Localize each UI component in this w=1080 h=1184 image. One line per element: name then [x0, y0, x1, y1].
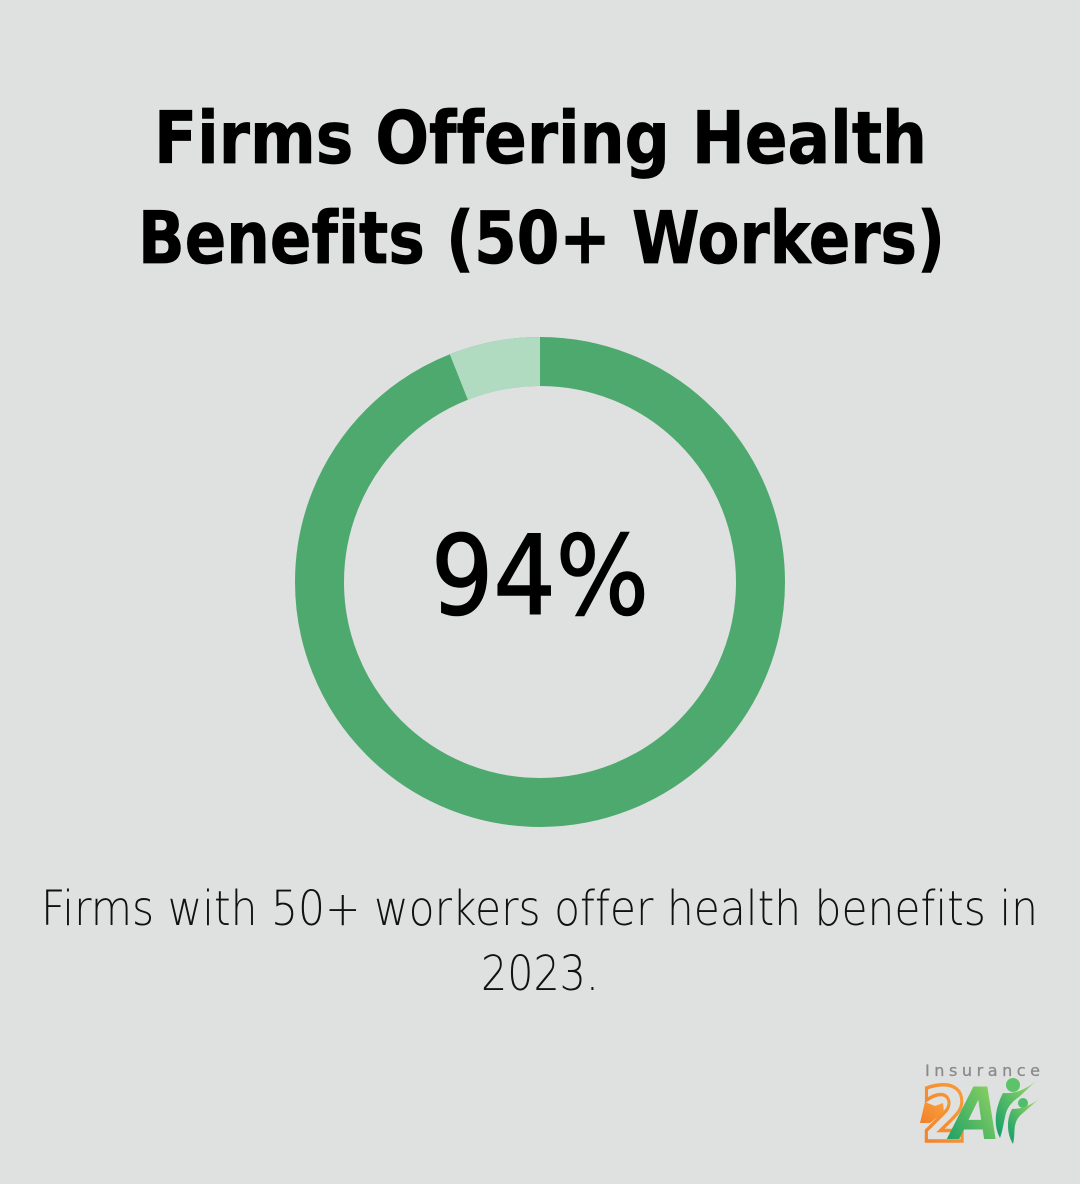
logo: Insurance 2 AI: A: [947, 1072, 1001, 1156]
title: Firms Offering Health: [154, 96, 927, 180]
title: Benefits (50+ Workers): [138, 196, 945, 280]
center value: 94%: [431, 512, 649, 640]
logo: Insurance 2 AI: [920, 1061, 1040, 1159]
logo: Insurance 2 AI: Insurance: [925, 1061, 1040, 1080]
title: [138, 96, 945, 280]
logo: Insurance 2 AI: 2: [921, 1070, 968, 1159]
caption: 2023.: [481, 946, 599, 1002]
caption: [41, 881, 1038, 1002]
donut chart: 94%: [320, 362, 760, 802]
